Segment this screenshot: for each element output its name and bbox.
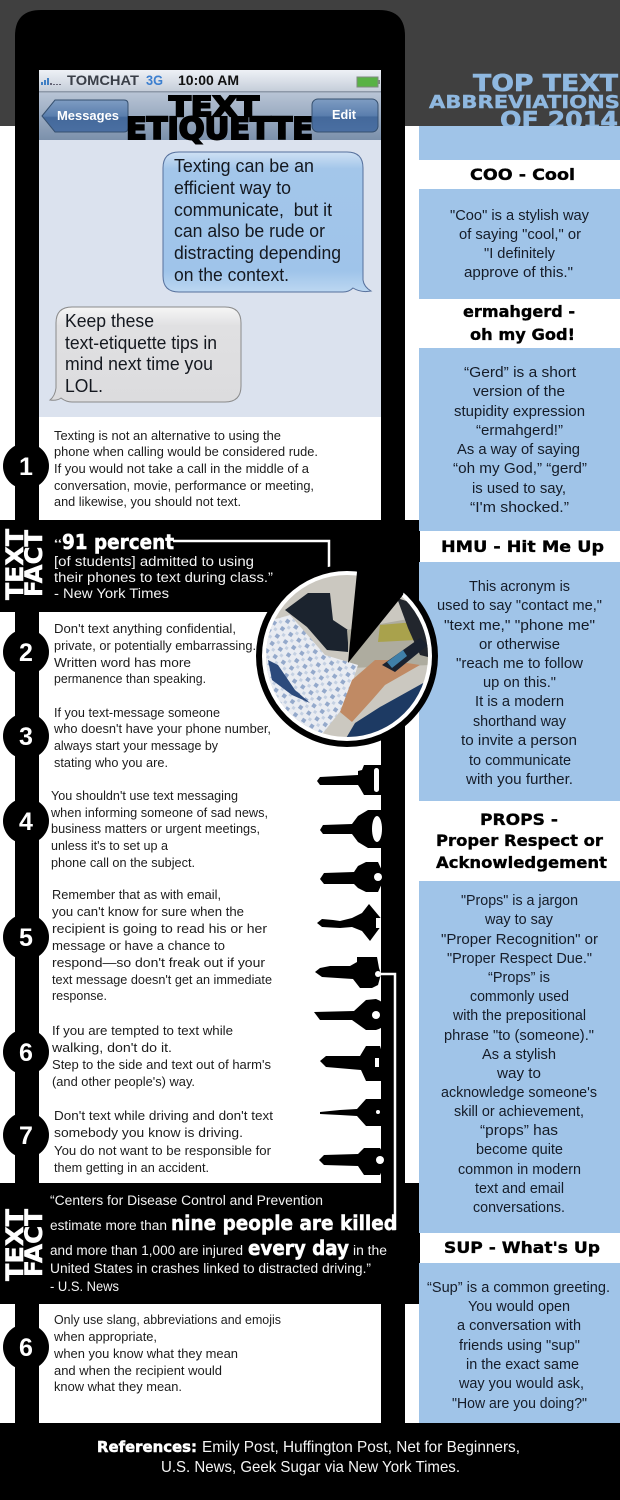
PROPS panel: commonly used xyxy=(470,989,569,1005)
tip 5 xyxy=(3,887,272,1003)
status bar: 10:00 AM xyxy=(178,72,239,88)
COO heading: COO - Cool xyxy=(470,165,575,184)
tip 1: Texting is not an alternative to using the xyxy=(54,428,281,443)
tip 4: phone call on the subject. xyxy=(51,855,195,870)
main title: TEXT xyxy=(169,90,259,123)
tip 8: and when the recipient would xyxy=(54,1363,222,1378)
blue message bubble: on the context. xyxy=(174,265,289,285)
right column: abbreviations xyxy=(419,126,620,1423)
key 8 xyxy=(320,1099,382,1126)
footer references xyxy=(0,1423,620,1500)
tip 3: 3 xyxy=(19,723,33,751)
status bar xyxy=(39,70,381,92)
PROPS panel: "Props" is a jargon xyxy=(461,893,578,909)
HMU panel: or otherwise xyxy=(479,637,560,653)
tip 6: If you are tempted to text while xyxy=(52,1023,233,1038)
PROPS heading: PROPS - xyxy=(480,810,558,829)
tip 1: phone when calling would be considered rude. xyxy=(54,444,318,459)
tip 6: 6 xyxy=(19,1039,33,1067)
gray message bubble: Keep these xyxy=(65,311,154,331)
footer references: U.S. News, Geek Sugar via New York Times. xyxy=(161,1459,460,1476)
PROPS panel: common in modern xyxy=(458,1162,581,1178)
SUP panel: a conversation with xyxy=(457,1318,581,1334)
tip 3: If you text-message someone xyxy=(54,705,220,720)
tip 1: conversation, movie, performance or meeting, xyxy=(54,478,314,493)
key 6 xyxy=(314,999,389,1030)
PROPS panel: way to xyxy=(496,1066,541,1082)
phone screen xyxy=(39,70,381,1423)
COO panel: approve of this." xyxy=(464,265,573,281)
main title: ETIQUETTE xyxy=(126,112,313,147)
tip 8: Only use slang, abbreviations and emojis xyxy=(54,1312,281,1327)
tip 5: recipient is going to read his or her xyxy=(52,921,268,936)
gray message bubble xyxy=(50,307,241,402)
SUP panel: in the exact same xyxy=(466,1357,579,1373)
tip 4 xyxy=(3,788,268,870)
SUP heading: SUP - What's Up xyxy=(444,1238,600,1257)
tip 4: unless it's to set up a xyxy=(51,838,169,853)
tip 3 xyxy=(3,705,271,770)
text fact label: FACT xyxy=(20,1208,48,1277)
key 3 xyxy=(320,862,385,892)
navigation bar xyxy=(39,91,381,140)
blue message bubble: Texting can be an xyxy=(174,156,314,176)
text fact quote: - U.S. News xyxy=(50,1279,119,1294)
tip 4: You shouldn't use text messaging xyxy=(51,788,238,803)
tip 1: If you would not take a call in the middle of a xyxy=(54,461,310,476)
tip 3: who doesn't have your phone number, xyxy=(53,721,271,736)
main title xyxy=(126,90,313,147)
message area xyxy=(39,140,381,417)
tip 7: Don't text while driving and don't text xyxy=(54,1108,273,1123)
tip 3: always start your message by xyxy=(54,738,218,753)
connector line xyxy=(173,541,329,578)
text fact quote: United States in crashes linked to distracted driving.” xyxy=(50,1261,371,1276)
tip 2: Don't text anything confidential, xyxy=(54,621,236,636)
PROPS panel: "Proper Respect Due." xyxy=(447,951,592,967)
ermahgerd panel: “Gerd” is a short xyxy=(464,365,576,381)
tip 5: you can't know for sure when the xyxy=(52,904,244,919)
navigation bar: Edit xyxy=(332,107,357,122)
text fact quote: in the xyxy=(353,1243,387,1258)
SUP panel: way you would ask, xyxy=(458,1376,584,1392)
abbreviations title: OF 2014 xyxy=(500,108,618,134)
tip 1: and likewise, you should not text. xyxy=(54,494,241,509)
text fact label xyxy=(1,1208,48,1281)
footer references: Emily Post, Huffington Post, Net for Beginners, xyxy=(202,1439,520,1456)
abbreviations title: ABBREVIATIONS xyxy=(429,92,620,113)
tip 7: 7 xyxy=(19,1122,33,1150)
HMU panel: up on this." xyxy=(483,675,556,691)
PROPS panel xyxy=(419,881,620,1233)
tip 4: 4 xyxy=(19,808,33,836)
tip 8: know what they mean. xyxy=(54,1379,182,1394)
text fact quote: [of students] admitted to using xyxy=(54,554,254,569)
HMU panel: shorthand way xyxy=(473,714,567,730)
phone body xyxy=(15,10,405,1423)
abbreviations title xyxy=(429,71,620,134)
key 5 xyxy=(315,957,381,988)
blue message bubble: can also be rude or xyxy=(174,221,325,241)
tip 5: 5 xyxy=(19,924,33,952)
SUP panel: friends using "sup" xyxy=(459,1338,580,1354)
HMU heading: HMU - Hit Me Up xyxy=(441,537,604,556)
abbreviations title: TOP TEXT xyxy=(473,71,618,97)
HMU panel: This acronym is xyxy=(469,579,570,595)
tip 5: Remember that as with email, xyxy=(52,887,221,902)
tip 5: message or have a chance to xyxy=(52,938,225,953)
HMU panel: with you further. xyxy=(465,772,573,788)
navigation bar: Messages xyxy=(57,108,119,123)
status bar: 3G xyxy=(146,72,163,88)
HMU panel xyxy=(419,562,620,801)
blue header block xyxy=(419,126,620,160)
tip 8 xyxy=(3,1312,281,1394)
top header background xyxy=(0,0,620,126)
tip 7: You do not want to be responsible for xyxy=(54,1143,272,1158)
text fact quote: 91 percent xyxy=(62,530,174,554)
COO panel: "I definitely xyxy=(484,246,556,262)
PROPS panel: skill or achievement, xyxy=(454,1104,584,1120)
blue message bubble xyxy=(163,152,371,292)
gray message bubble: LOL. xyxy=(65,376,103,396)
PROPS panel: acknowledge someone's xyxy=(441,1085,597,1101)
ermahgerd panel: “I'm shocked.” xyxy=(470,500,569,516)
text fact quote xyxy=(54,530,273,601)
status bar: TOMCHAT xyxy=(67,72,139,88)
tip 7: them getting in an accident. xyxy=(54,1160,209,1175)
tip 5: response. xyxy=(52,988,107,1003)
tip 6: walking, don't do it. xyxy=(51,1040,172,1055)
PROPS heading: Proper Respect or xyxy=(436,831,603,850)
PROPS panel: become quite xyxy=(476,1142,563,1158)
PROPS panel: “props” has xyxy=(480,1123,558,1139)
ermahgerd panel: “oh my God,” “gerd” xyxy=(453,461,587,477)
ermahgerd panel: As a way of saying xyxy=(457,442,580,458)
PROPS heading: Acknowledgement xyxy=(436,853,607,872)
text fact label: TEXT xyxy=(1,528,29,600)
PROPS panel: As a stylish xyxy=(482,1047,556,1063)
connector line from key to fact xyxy=(378,974,395,1230)
tip 8: 6 xyxy=(19,1334,33,1362)
tip 8: when you know what they mean xyxy=(53,1346,238,1361)
tip 2: 2 xyxy=(19,639,33,667)
tip 8: when appropriate, xyxy=(53,1329,157,1344)
tip 7: somebody you know is driving. xyxy=(54,1125,243,1140)
tip 2: Written word has more xyxy=(54,655,191,670)
PROPS panel: phrase "to (someone)." xyxy=(444,1028,594,1044)
tip 7 xyxy=(3,1108,273,1175)
text fact quote: their phones to text during class.” xyxy=(54,570,273,585)
tip 5: text message doesn't get an immediate xyxy=(52,972,272,987)
footer references: References: xyxy=(97,1438,197,1456)
gray message bubble: mind next time you xyxy=(65,354,213,374)
text fact quote: and more than 1,000 are injured xyxy=(50,1243,243,1258)
text fact quote: - New York Times xyxy=(54,586,169,601)
text fact quote: “Centers for Disease Control and Prevention xyxy=(50,1193,323,1208)
ermahgerd heading: ermahgerd - xyxy=(463,302,575,321)
text fact quote xyxy=(50,1193,397,1294)
text fact quote: nine people are killed xyxy=(171,1211,397,1235)
PROPS panel: text and email xyxy=(475,1181,564,1197)
tip 6: (and other people's) way. xyxy=(52,1074,195,1089)
tip 5: respond—so don't freak out if your xyxy=(52,955,266,970)
circular photo of person texting xyxy=(256,560,438,747)
blue message bubble: distracting depending xyxy=(174,243,341,263)
ermahgerd panel: is used to say, xyxy=(472,481,566,497)
ermahgerd panel xyxy=(419,348,620,531)
keys column xyxy=(314,765,389,1175)
PROPS panel: with the prepositional xyxy=(452,1008,586,1024)
tip 2: permanence than speaking. xyxy=(54,671,206,686)
key 1 xyxy=(317,765,382,795)
blue message bubble: efficient way to xyxy=(174,178,291,198)
tip 2: private, or potentially embarrassing. xyxy=(54,638,256,653)
tip 1 xyxy=(3,428,318,509)
text fact label: TEXT xyxy=(1,1208,29,1281)
ermahgerd panel: version of the xyxy=(473,384,565,400)
HMU panel: to communicate xyxy=(469,753,571,769)
key 9 xyxy=(319,1148,387,1175)
COO panel: of saying "cool," or xyxy=(459,227,581,243)
text fact quote: every day xyxy=(248,1236,349,1260)
HMU panel: "text me," "phone me" xyxy=(444,618,595,634)
PROPS panel: conversations. xyxy=(473,1200,565,1216)
PROPS heading xyxy=(436,810,607,872)
ermahgerd panel: “ermahgerd!” xyxy=(476,423,563,439)
gray message bubble: text-etiquette tips in xyxy=(65,333,217,353)
ermahgerd heading xyxy=(463,302,575,344)
HMU panel: "reach me to follow xyxy=(456,656,584,672)
text fact band 2 xyxy=(0,1183,420,1304)
ermahgerd heading: oh my God! xyxy=(470,325,575,344)
PROPS panel: "Proper Recognition" or xyxy=(441,932,598,948)
tip 1: 1 xyxy=(19,453,33,481)
SUP panel: “Sup” is a common greeting. xyxy=(427,1280,610,1296)
SUP panel xyxy=(419,1263,620,1423)
COO panel xyxy=(419,189,620,299)
key 4 xyxy=(317,904,384,941)
tip 4: business matters or urgent meetings, xyxy=(51,821,260,836)
text fact label xyxy=(1,528,48,600)
text fact quote: estimate more than xyxy=(50,1218,167,1233)
blue message bubble: communicate, but it xyxy=(174,200,332,220)
text fact quote: “ xyxy=(54,537,62,552)
ermahgerd panel: stupidity expression xyxy=(454,404,585,420)
PROPS panel: “Props” is xyxy=(488,970,550,986)
COO panel: "Coo" is a stylish way xyxy=(450,208,590,224)
key 7 xyxy=(320,1046,385,1081)
key 2 xyxy=(320,810,382,848)
tip 3: stating who you are. xyxy=(54,755,168,770)
HMU panel: It is a modern xyxy=(475,694,564,710)
HMU panel: to invite a person xyxy=(461,733,577,749)
SUP panel: "How are you doing?" xyxy=(452,1396,587,1412)
PROPS panel: way to say xyxy=(484,912,554,928)
SUP panel: You would open xyxy=(468,1299,570,1315)
HMU panel: used to say "contact me," xyxy=(437,598,602,614)
text fact label: FACT xyxy=(20,529,48,597)
text fact band 1 xyxy=(0,520,420,612)
tip 6: Step to the side and text out of harm's xyxy=(52,1057,271,1072)
tip 2 xyxy=(3,621,256,686)
tip 6 xyxy=(3,1023,271,1089)
tip 4: when informing someone of sad news, xyxy=(50,805,268,820)
